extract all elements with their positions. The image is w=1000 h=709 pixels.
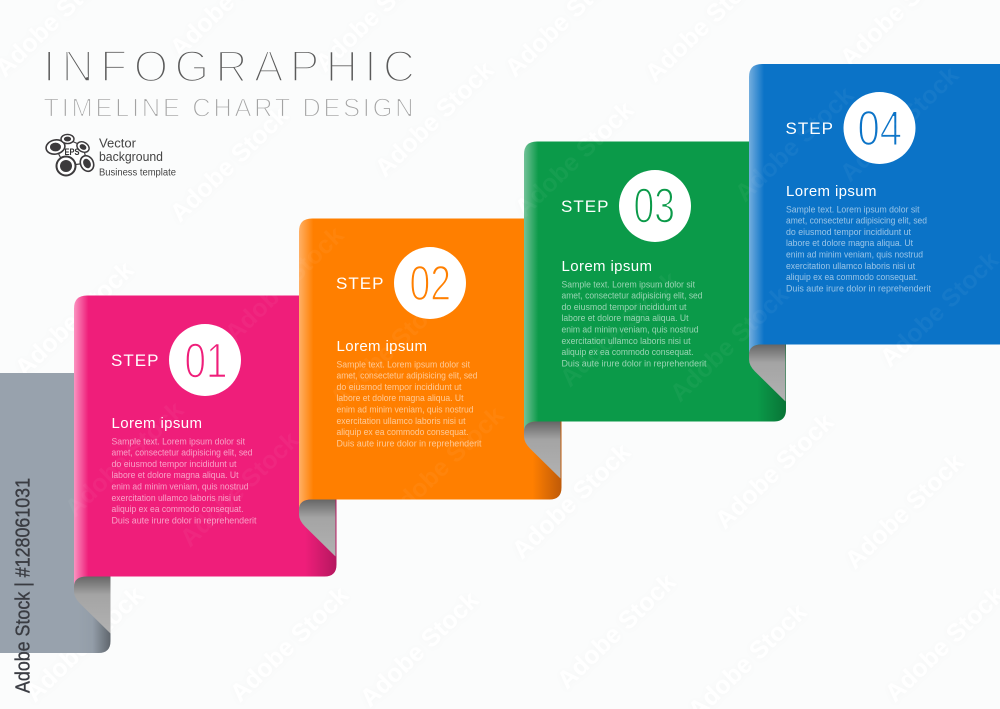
body text: labore et dolore magna aliqua. Ut (112, 470, 239, 481)
watermark layer on ribbons: Adobe Stock (665, 281, 794, 407)
fold under blue ribbon (749, 344, 786, 402)
body text (112, 436, 257, 526)
body text (562, 279, 707, 369)
number badge (394, 247, 466, 319)
watermark layer on background: Adobe Stock (225, 581, 354, 707)
watermark layer on background: Adobe Stock (355, 586, 484, 709)
title (43, 42, 415, 122)
step label: STEP (786, 119, 833, 138)
body text: aliquip ex ea commodo consequat. (562, 347, 694, 358)
body text: do eiusmod tempor incididunt ut (562, 302, 687, 313)
body text: Duis aute irure dolor in reprehenderit (336, 438, 482, 449)
watermark layer on background: Adobe Stock (835, 61, 964, 187)
body text: exercitation ullamco laboris nisi ut (336, 416, 466, 427)
body text: labore et dolore magna aliqua. Ut (336, 393, 464, 404)
watermark layer on background: Adobe Stock (370, 56, 499, 182)
body text: labore et dolore magna aliqua. Ut (562, 313, 689, 324)
watermark layer on background: Adobe Stock (510, 96, 639, 222)
watermark layer on background: Adobe Stock (10, 256, 139, 382)
watermark layer on ribbons: Adobe Stock (325, 286, 454, 412)
body text: Sample text. Lorem ipsum dolor sit (562, 279, 695, 290)
logo caption: background (99, 150, 163, 164)
number badge (169, 324, 241, 396)
body text: do eiusmod tempor incididunt ut (786, 227, 911, 238)
logo caption: Vector (99, 136, 136, 150)
logo caption (99, 136, 176, 178)
body text: enim ad minim veniam, quis nostrud (786, 250, 923, 260)
heading: Lorem ipsum (336, 338, 427, 355)
number: 03 (634, 180, 675, 234)
body text: enim ad minim veniam, quis nostrud (112, 482, 248, 492)
body text: exercitation ullamco laboris nisi ut (562, 336, 691, 347)
body text: Duis aute irure dolor in reprehenderit (562, 358, 707, 369)
title: INFOGRAPHIC (43, 42, 415, 92)
blue ribbon (749, 64, 1000, 355)
body text: Duis aute irure dolor in reprehenderit (112, 515, 257, 526)
watermark layer on ribbons: Adobe Stock (510, 96, 639, 222)
watermark layer on background: Adobe Stock (840, 448, 969, 574)
body text: amet, consectetur adipisicing elit, sed (786, 216, 927, 227)
heading: Lorem ipsum (112, 415, 202, 432)
watermark layer on background: Adobe Stock (710, 408, 839, 534)
watermark layer on background: Adobe Stock (165, 101, 294, 227)
icon: EPS badge: EPS (64, 147, 80, 158)
body text: amet, consectetur adipisicing elit, sed (562, 291, 702, 302)
body text: do eiusmod tempor incididunt ut (336, 382, 462, 393)
panel: step 01 (74, 296, 336, 634)
panel: step 02 (299, 218, 562, 556)
watermark layer on ribbons: Adobe Stock (175, 426, 304, 552)
body text: Duis aute irure dolor in reprehenderit (786, 283, 931, 294)
watermark layer on ribbons: Adobe Stock (730, 81, 859, 207)
fold under green ribbon (524, 422, 560, 478)
watermark layer on background: Adobe Stock (507, 438, 636, 564)
body text: amet, consectetur adipisicing elit, sed (112, 448, 252, 459)
body text (336, 359, 482, 449)
body text: Sample text. Lorem ipsum dolor sit (336, 359, 470, 370)
body text: enim ad minim veniam, quis nostrud (562, 324, 698, 336)
body text (786, 204, 931, 294)
watermark layer on ribbons: Adobe Stock (380, 401, 509, 527)
body text: exercitation ullamco laboris nisi ut (786, 261, 915, 272)
watermark layer on ribbons: Adobe Stock (220, 221, 349, 347)
orange ribbon (299, 218, 562, 510)
step label: STEP (111, 351, 158, 370)
watermark layer on background: Adobe Stock (20, 581, 149, 707)
body text: Sample text. Lorem ipsum dolor sit (112, 436, 245, 447)
stock id label: Adobe Stock | #128061031 (12, 478, 34, 693)
logo caption: Business template (99, 168, 176, 178)
fold under pink ribbon (74, 576, 110, 634)
heading: Lorem ipsum (562, 258, 652, 275)
pink ribbon (74, 296, 336, 587)
body text: labore et dolore magna aliqua. Ut (786, 238, 913, 249)
body text: aliquip ex ea commodo consequat. (786, 272, 918, 283)
body text: Sample text. Lorem ipsum dolor sit (786, 204, 920, 215)
body text: amet, consectetur adipisicing elit, sed (336, 371, 478, 382)
watermark layer on background: Adobe Stock (552, 568, 681, 694)
grey starting ribbon (0, 373, 110, 653)
heading: Lorem ipsum (786, 183, 876, 200)
number badge (844, 92, 916, 164)
watermark layer on ribbons (60, 61, 1000, 552)
body text: exercitation ullamco laboris nisi ut (112, 493, 241, 504)
number: 04 (858, 102, 902, 156)
green ribbon (524, 142, 786, 432)
icon: EPS badge (45, 134, 96, 176)
number: 02 (410, 257, 451, 311)
subtitle: TIMELINE CHART DESIGN (44, 94, 414, 122)
watermark layer on ribbons: Adobe Stock (835, 61, 964, 187)
number badge (619, 170, 691, 242)
watermark layer on ribbons: Adobe Stock (60, 396, 189, 522)
body text: enim ad minim veniam, quis nostrud (336, 404, 474, 416)
fold under orange ribbon (299, 500, 336, 556)
step label: STEP (561, 197, 608, 216)
body text: aliquip ex ea commodo consequat. (336, 427, 468, 438)
step label: STEP (336, 274, 384, 293)
watermark layer on ribbons: Adobe Stock (555, 266, 684, 392)
panel: step 04 (749, 64, 1000, 402)
panel: step 03 (524, 142, 786, 478)
number: 01 (184, 334, 228, 388)
body text: do eiusmod tempor incididunt ut (112, 459, 237, 470)
body text: aliquip ex ea commodo consequat. (112, 504, 244, 515)
